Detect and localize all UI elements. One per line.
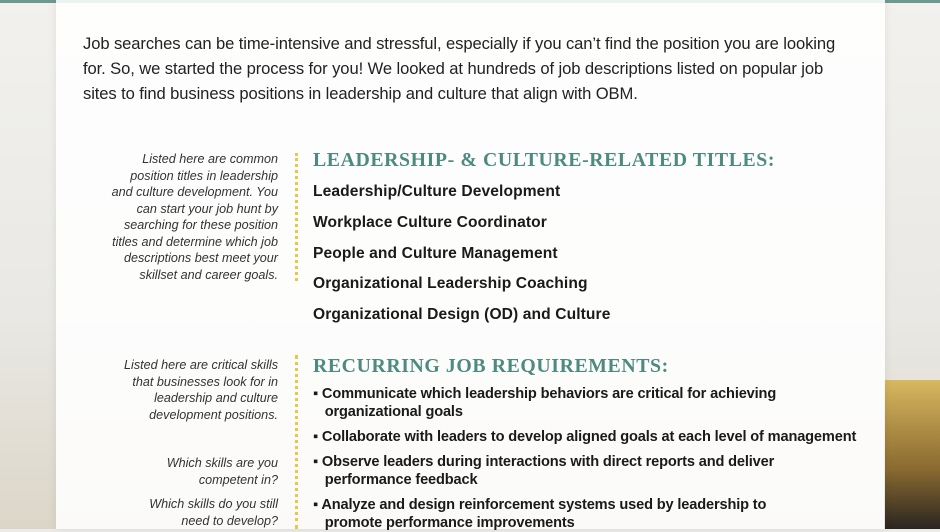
note: questions [167,456,278,486]
requirements list: ▪ Observe leaders during interactions with direct reports and deliver [313,454,774,470]
requirements list: promote performance improvements [325,515,575,531]
text: need to develop? [181,514,278,528]
heading: titles: LEADERSHIP- & CULTURE-RELATED TITLES: [313,149,775,171]
titles list: Organizational Leadership Coaching [313,275,588,292]
note: titles: titles and determine which job [112,234,278,248]
note: skills: leadership and culture [154,391,278,405]
requirements list [313,386,856,531]
note: titles: and culture development. You [112,185,278,199]
note: titles: can start your job hunt by [137,202,278,216]
note: skills: Listed here are critical skills [124,358,278,372]
note: skills: that businesses look for in [132,374,278,388]
titles list [313,183,610,323]
note: titles: searching for these position [124,218,278,232]
intro text: for. So, we started the process for you! We looked at hundreds of job descriptions listed on popular job [83,59,823,78]
requirements list: ▪ Analyze and design reinforcement systems used by leadership to [313,497,766,513]
note: titles [112,152,279,282]
note: titles: skillset and career goals. [139,268,278,282]
intro text: Job searches can be time-intensive and stressful, especially if you can’t find the position you are looking [83,34,835,53]
text: Which skills do you still [149,497,278,511]
requirements list: ▪ Collaborate with leaders to develop aligned goals at each level of management [313,429,856,445]
top teal border [0,0,940,3]
titles list: Workplace Culture Coordinator [313,214,547,231]
note: skills: development positions. [149,408,278,422]
note: titles: descriptions best meet your [124,251,278,265]
background: dark table corner [884,380,940,529]
note: titles: Listed here are common [142,152,278,166]
intro text: sites to find business positions in leadership and culture that align with OBM. [83,84,638,103]
heading: requirements: RECURRING JOB REQUIREMENTS: [313,355,669,377]
requirements list: ▪ Communicate which leadership behaviors are critical for achieving [313,386,776,402]
note: titles: position titles in leadership [130,168,278,182]
requirements list: performance feedback [325,472,477,488]
requirements list: organizational goals [325,404,463,420]
note: questions: competent in? [199,472,278,486]
titles list: People and Culture Management [313,245,558,262]
note: questions: Which skills are you [167,456,278,470]
note: skills [124,358,278,422]
titles list: Leadership/Culture Development [313,183,560,200]
titles list: Organizational Design (OD) and Culture [313,306,610,323]
intro text [83,34,835,103]
